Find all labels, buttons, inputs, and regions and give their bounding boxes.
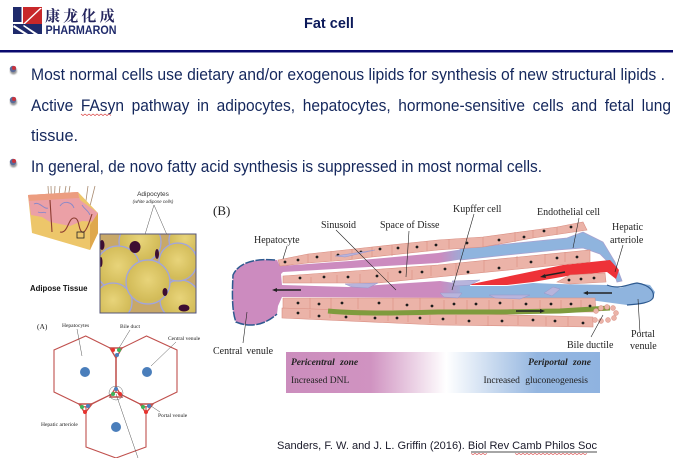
central venule outline xyxy=(232,260,277,325)
bullet 2 xyxy=(10,97,671,145)
logo: 康龙化成 xyxy=(45,5,118,26)
labels: Space of Disse xyxy=(380,220,440,231)
top row xyxy=(278,222,587,266)
labels: arteriole xyxy=(610,235,644,246)
lobule labels: Hepatocytes xyxy=(62,323,89,329)
diagram B: liver sinusoid xyxy=(213,203,657,357)
flow arrows xyxy=(272,272,612,313)
zone gradient bar xyxy=(286,352,600,393)
sinusoid lumen: lower channel and portal venule xyxy=(460,283,655,305)
labels: Hepatic xyxy=(612,222,644,233)
illustration: skin cross-section xyxy=(28,186,98,250)
logo xyxy=(13,5,118,37)
sinusoid lumen: central venule and pericentral channels xyxy=(232,248,470,325)
periportal zone text xyxy=(483,358,592,386)
labels: Kupffer cell xyxy=(453,204,502,215)
middle row xyxy=(283,250,590,283)
leader lines xyxy=(243,214,640,343)
header rule xyxy=(0,50,673,52)
lower row B xyxy=(282,308,593,327)
title: Fat cell xyxy=(304,16,354,32)
lobule labels xyxy=(41,323,201,428)
lobule labels: Bile duct xyxy=(120,324,140,330)
labels: Bile ductile xyxy=(567,340,614,351)
small cells xyxy=(557,273,606,284)
pericentral zone text: Increased DNL xyxy=(291,376,349,386)
bullet 2: tissue. xyxy=(31,127,78,145)
lobule labels: Central venule xyxy=(168,336,201,342)
pericentral zone text: Pericentral zone xyxy=(291,358,359,368)
lower row A xyxy=(283,298,596,312)
bullet 3: In general, de novo fatty acid synthesis is suppressed in most normal cells. xyxy=(31,158,542,176)
labels: venule xyxy=(630,341,657,352)
lobule labels: Hepatic arteriole xyxy=(41,422,78,428)
hepatocyte rows xyxy=(278,222,606,327)
bullet 1: Most normal cells use dietary and/or exogenous lipids for synthesis of new structural lipids . xyxy=(31,66,665,84)
labels: Hepatocyte xyxy=(254,235,300,246)
periportal zone text: Periportal zone xyxy=(528,358,592,368)
diagram A: hepatic lobule xyxy=(37,322,201,458)
diagram B: liver sinusoid: (B) xyxy=(213,203,230,218)
diagram A: hepatic lobule: (A) xyxy=(37,322,48,331)
labels: Endothelial cell xyxy=(537,207,600,218)
bullet list xyxy=(10,66,671,176)
labels xyxy=(213,204,657,357)
venules and ducts xyxy=(80,348,152,432)
labels: Central venule xyxy=(213,346,274,357)
labels: Portal xyxy=(631,329,655,340)
labels: Sinusoid xyxy=(321,220,356,231)
portal venule outline xyxy=(607,283,653,305)
bile canaliculus xyxy=(328,308,610,313)
hexagons xyxy=(54,336,177,458)
label: Adipose Tissue: Adipose Tissue xyxy=(30,284,88,293)
citation: Sanders, F. W. and J. L. Griffin (2016). Biol Rev Camb Philos Soc xyxy=(277,440,597,452)
nuclei xyxy=(284,226,595,324)
label: Adipocytes: Adipocytes xyxy=(137,191,170,198)
logo: PHARMARON xyxy=(46,25,116,37)
Kupffer and endothelial cells xyxy=(335,250,560,299)
pericentral zone text xyxy=(291,358,359,386)
hepatic arteriole xyxy=(467,260,619,285)
lobule labels: Portal venule xyxy=(158,413,188,419)
illustration: adipocytes micrograph xyxy=(100,234,196,314)
sinusoid lumen: upper periportal channel xyxy=(460,232,622,282)
periportal zone text: Increased gluconeogenesis xyxy=(483,376,588,386)
label: Adipocytes xyxy=(133,191,177,258)
label: Adipocytes: (white adipose cells) xyxy=(133,199,174,204)
